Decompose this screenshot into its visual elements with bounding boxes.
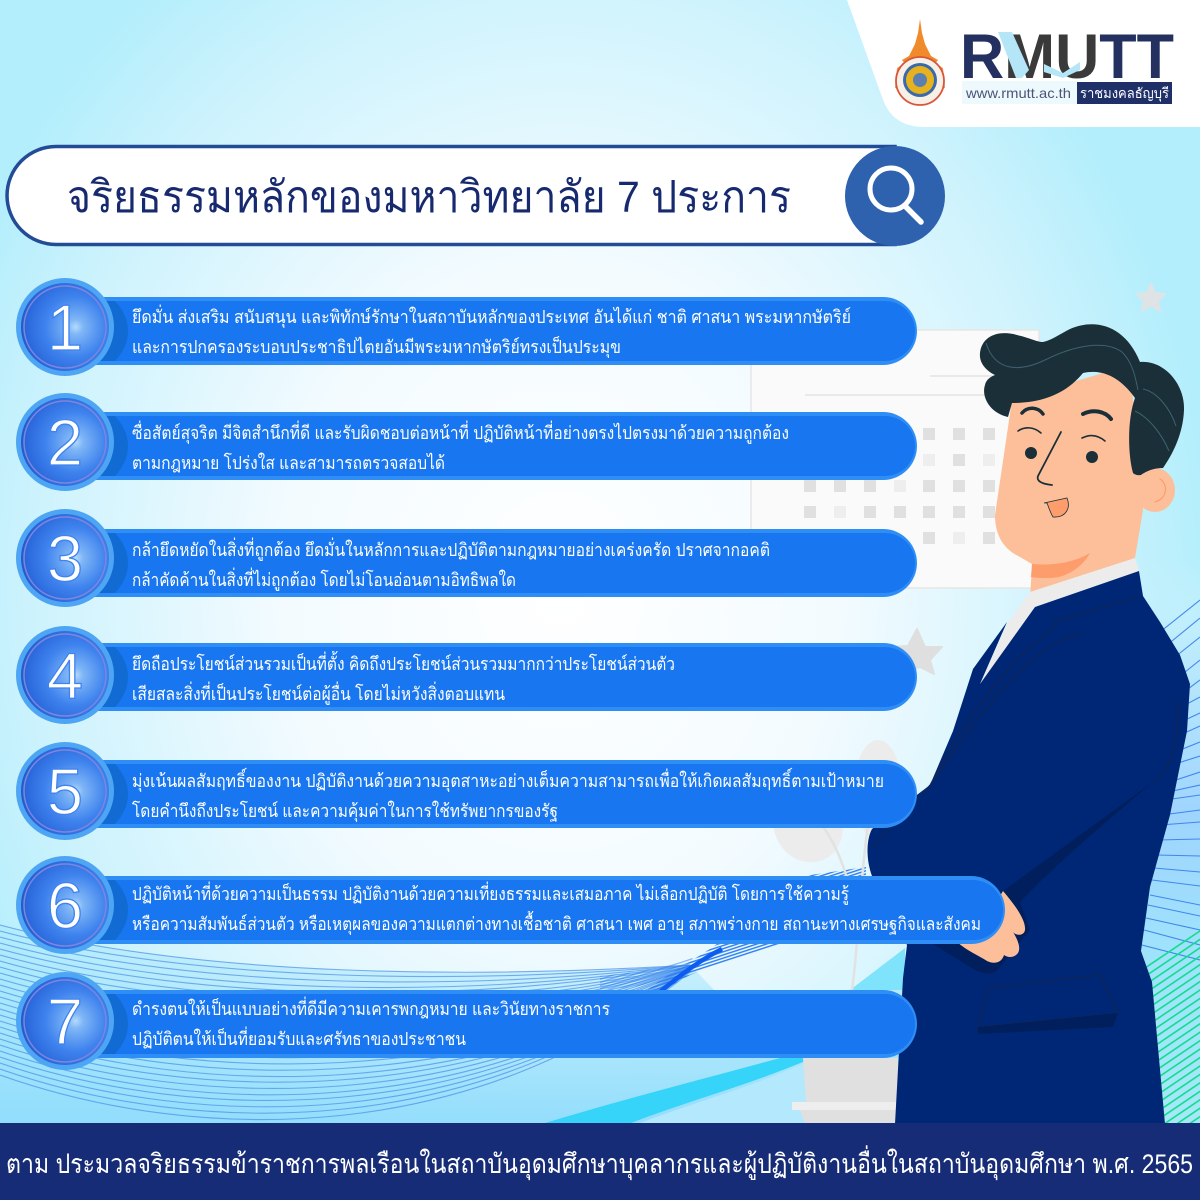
item 5 bar <box>90 760 917 828</box>
item 5 text: มุ่งเน้นผลสัมฤทธิ์ของงาน ปฏิบัติงานด้วยความอุตสาหะอย่างเต็มความสามารถเพื่อให้เกิดผลสัมฤทธิ์ตามเป้าหมาย <box>132 767 884 792</box>
logo wordmark: RMUTT <box>960 22 1174 92</box>
man arm shadow <box>933 782 1153 973</box>
item 7 <box>16 972 917 1070</box>
item 4 bar <box>90 643 917 711</box>
item 2 text <box>132 420 789 473</box>
item 2 <box>16 393 917 491</box>
item 4 text <box>132 651 675 705</box>
item 7 bar <box>90 990 917 1058</box>
man ear <box>1135 468 1175 512</box>
item 3 bar <box>90 529 917 597</box>
item 6 text: หรือความสัมพันธ์ส่วนตัว หรือเหตุผลของความแตกต่างทางเชื้อชาติ ศาสนา เพศ อายุ สภาพร่างกาย สถานะทางเศรษฐกิจและสังคม <box>132 911 981 935</box>
item 1 text: ยึดมั่น ส่งเสริม สนับสนุน และพิทักษ์รักษาในสถาบันหลักของประเทศ อันได้แก่ ชาติ ศาสนา พระมหากษัตริย์ <box>132 304 851 328</box>
item 4 <box>16 626 917 724</box>
calendar background <box>751 330 1039 588</box>
item 7 number <box>16 972 114 1070</box>
item 7 text: ดำรงตนให้เป็นแบบอย่างที่ดีมีความเคารพกฎหมาย และวินัยทางราชการ <box>132 996 610 1019</box>
item 1 bar <box>90 297 917 365</box>
logo url and thai name: ราชมงคลธัญบุรี <box>1080 85 1169 102</box>
figure: businessman <box>868 324 1190 1124</box>
man jacket seams <box>873 596 1178 847</box>
item 2 text: ซื่อสัตย์สุจริต มีจิตสำนึกที่ดี และรับผิดชอบต่อหน้าที่ ปฏิบัติหน้าที่อย่างตรงไปตรงมาด้วยความถูกต้อง <box>132 420 789 444</box>
item 3 <box>16 509 917 607</box>
item 1 text <box>132 304 851 358</box>
man hand <box>955 891 1025 963</box>
item 2 bar <box>90 412 917 480</box>
item 6 number <box>16 856 114 954</box>
item 5 text: โดยคำนึงถึงประโยชน์ และความคุ้มค่าในการใช้ทรัพยากรของรัฐ <box>132 800 558 822</box>
item 1 number <box>16 278 114 376</box>
man hair <box>980 324 1184 475</box>
panel: right wave lines <box>1130 560 1200 1125</box>
item 6 text: ปฏิบัติหน้าที่ด้วยความเป็นธรรม ปฏิบัติงานด้วยความเที่ยงธรรมและเสมอภาค ไม่เลือกปฏิบัติ โดยการใช้ความรู้ <box>132 881 849 905</box>
item 6 bar <box>90 876 1005 944</box>
man neck shadow <box>1031 553 1090 578</box>
item 4 text: เสียสละสิ่งที่เป็นประโยชน์ต่อผู้อื่น โดยไม่หวังสิ่งตอบแทน <box>132 681 505 705</box>
item 5 number <box>16 742 114 840</box>
item 6 number: 6 <box>47 869 83 942</box>
man face details <box>1018 408 1165 502</box>
item 3 text <box>132 537 770 591</box>
item 7 text: ปฏิบัติตนให้เป็นที่ยอมรับและศรัทธาของประชาชน <box>132 1026 466 1049</box>
decorative blue wave band <box>600 867 866 992</box>
footer bar <box>0 1123 1200 1200</box>
item 7 text <box>132 996 610 1049</box>
decorative wave lines left <box>0 925 690 1120</box>
item 5 text <box>132 767 884 822</box>
item 6 <box>16 856 1005 954</box>
item 2 number <box>16 393 114 491</box>
man jacket pocket <box>978 975 1118 1034</box>
man neck and face <box>995 365 1143 600</box>
item 6 text <box>132 881 981 935</box>
man jacket <box>868 571 1190 1124</box>
item 4 text: ยึดถือประโยชน์ส่วนรวมเป็นที่ตั้ง คิดถึงประโยชน์ส่วนรวมมากกว่าประโยชน์ส่วนตัว <box>132 651 675 674</box>
decorative wave fill left <box>0 925 905 1125</box>
plant in pot <box>761 740 902 1124</box>
title: จริยธรรมหลักของมหาวิทยาลัย 7 ประการ <box>67 173 791 222</box>
item 4 number <box>16 626 114 724</box>
item 7 number: 7 <box>47 985 83 1058</box>
logo url and thai name <box>962 81 1172 104</box>
man mouth <box>1044 498 1068 517</box>
icon: magnifier <box>845 146 945 246</box>
decorative cyan wave band <box>545 948 905 1123</box>
man collar and shirt <box>980 558 1140 685</box>
logo panel <box>847 0 1200 127</box>
icon: star small <box>1137 284 1165 311</box>
item 3 number: 3 <box>47 522 83 595</box>
logo url and thai name: www.rmutt.ac.th <box>965 85 1071 101</box>
title search bar <box>7 146 945 246</box>
item 5 <box>16 742 917 840</box>
item 2 number: 2 <box>47 406 83 479</box>
item 3 text: กล้ายึดหยัดในสิ่งที่ถูกต้อง ยึดมั่นในหลักการและปฏิบัติตามกฎหมายอย่างเคร่งครัด ปราศจากอคติ <box>132 537 770 561</box>
item 1 text: และการปกครองระบอบประชาธิปไตยอันมีพระมหากษัตริย์ทรงเป็นประมุข <box>132 335 621 358</box>
item 4 number: 4 <box>47 639 83 712</box>
logo emblem <box>895 19 945 105</box>
item 1 <box>16 278 917 376</box>
item 3 number <box>16 509 114 607</box>
item 2 text: ตามกฎหมาย โปร่งใส และสามารถตรวจสอบได้ <box>132 452 445 473</box>
item 5 number: 5 <box>47 755 83 828</box>
item 1 number: 1 <box>47 291 83 364</box>
icon: star large <box>890 629 942 674</box>
item 3 text: กล้าคัดค้านในสิ่งที่ไม่ถูกต้อง โดยไม่โอนอ่อนตามอิทธิพลใด <box>132 567 516 591</box>
man hair strands <box>986 343 1176 451</box>
